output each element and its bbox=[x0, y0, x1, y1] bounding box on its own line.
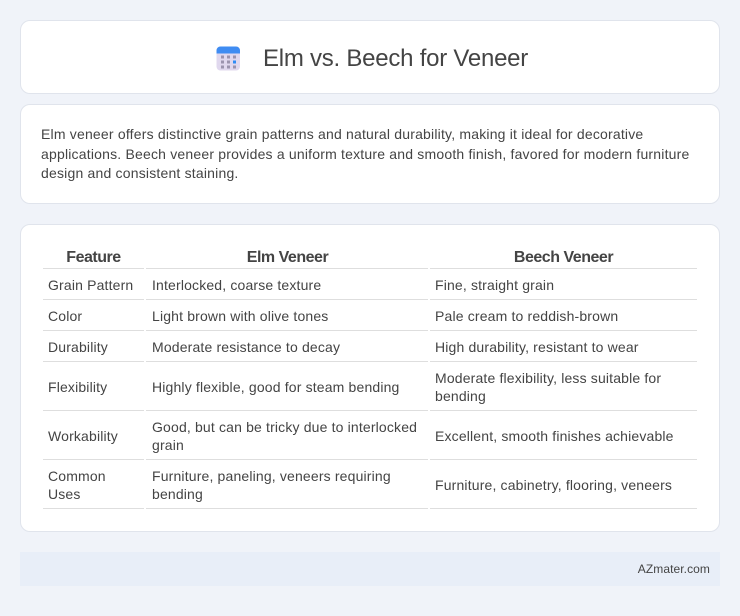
row: grain pattern: Grain Pattern bbox=[48, 277, 133, 293]
title card bbox=[20, 20, 720, 94]
header: Beech Veneer: Beech Veneer bbox=[514, 249, 613, 266]
intro text: applications. Beech veneer provides a uniform texture and smooth finish, favored for modern furniture bbox=[41, 146, 689, 162]
comparison table: Furniture, paneling, veneers requiring bbox=[152, 468, 391, 484]
comparison table: High durability, resistant to wear bbox=[435, 339, 639, 355]
intro text bbox=[41, 126, 689, 181]
comparison table: bending bbox=[435, 388, 486, 404]
intro text: design and consistent staining. bbox=[41, 165, 239, 181]
footer bar bbox=[20, 552, 720, 586]
intro card bbox=[20, 104, 720, 204]
row: common uses: Uses bbox=[48, 486, 81, 502]
comparison table: Excellent, smooth finishes achievable bbox=[435, 428, 674, 444]
row: flexibility: Flexibility bbox=[48, 379, 107, 395]
icon: calendar bbox=[216, 46, 240, 70]
comparison table: Moderate resistance to decay bbox=[152, 339, 340, 355]
comparison table: Pale cream to reddish-brown bbox=[435, 308, 618, 324]
comparison table: Highly flexible, good for steam bending bbox=[152, 379, 400, 395]
comparison table: Moderate flexibility, less suitable for bbox=[435, 370, 661, 386]
header: Elm Veneer: Elm Veneer bbox=[247, 249, 328, 266]
comparison table card bbox=[20, 224, 720, 532]
row: workability: Workability bbox=[48, 428, 118, 444]
row: durability: Durability bbox=[48, 339, 108, 355]
header: Feature: Feature bbox=[66, 249, 121, 266]
row: color: Color bbox=[48, 308, 82, 324]
comparison table: Good, but can be tricky due to interlocked bbox=[152, 419, 417, 435]
comparison table: bending bbox=[152, 486, 203, 502]
comparison table: Furniture, cabinetry, flooring, veneers bbox=[435, 477, 672, 493]
intro text: Elm veneer offers distinctive grain patterns and natural durability, making it ideal for decorative bbox=[41, 126, 643, 142]
comparison table: Fine, straight grain bbox=[435, 277, 554, 293]
row: common uses bbox=[48, 468, 106, 502]
comparison table: Interlocked, coarse texture bbox=[152, 277, 321, 293]
row: common uses: Common bbox=[48, 468, 106, 484]
title: Elm vs. Beech for Veneer bbox=[263, 45, 528, 72]
footer text: AZmater.com bbox=[638, 562, 710, 576]
comparison table: Light brown with olive tones bbox=[152, 308, 328, 324]
comparison table: grain bbox=[152, 437, 184, 453]
